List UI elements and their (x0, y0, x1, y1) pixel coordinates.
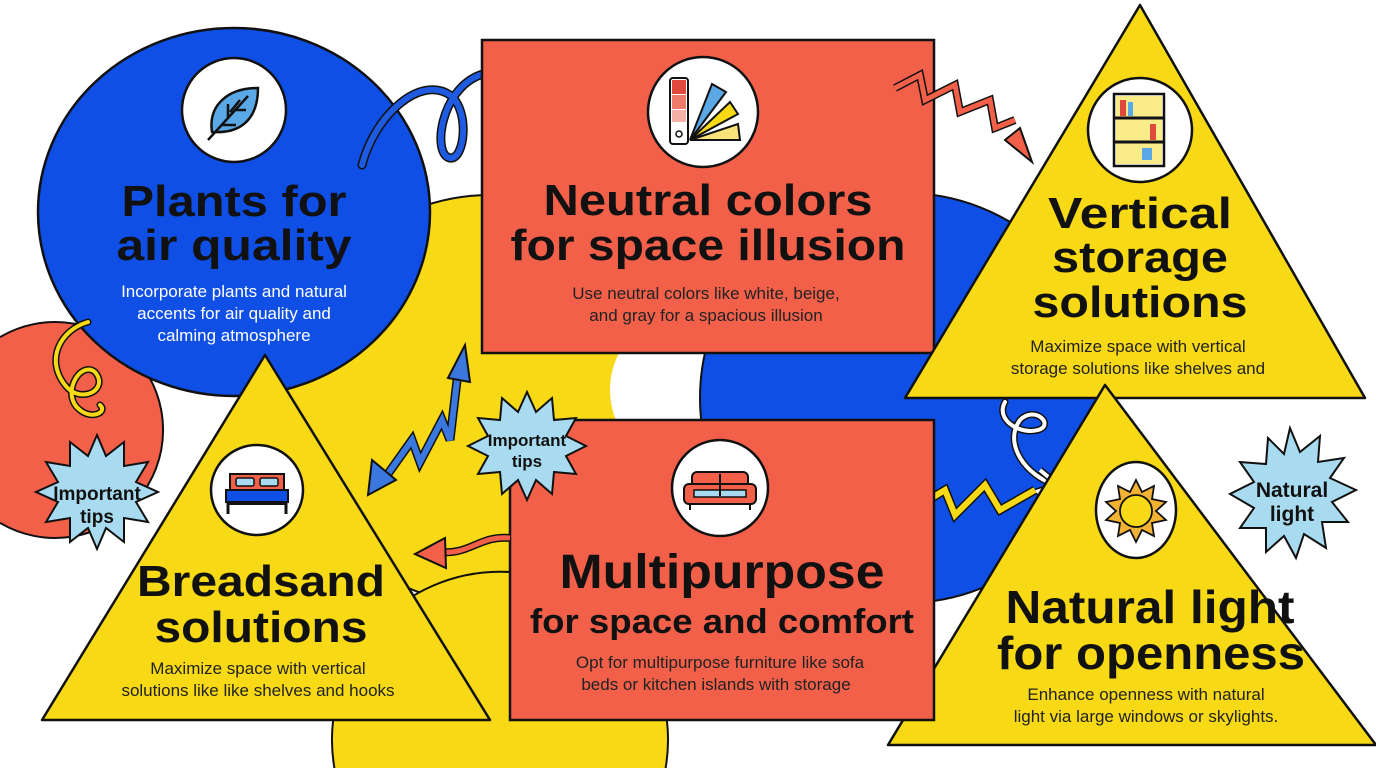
heading: plants: Plants for (122, 177, 346, 226)
arrow: yellow loop (56, 322, 102, 415)
badge: important tips center: Important (488, 431, 567, 450)
badge: natural light (1230, 428, 1356, 558)
icon: sun (1096, 462, 1176, 558)
background: red circle left (0, 322, 163, 538)
badge: important tips left (36, 435, 158, 549)
badge: natural light: Natural (1256, 479, 1328, 502)
arrow: red zigzag (895, 75, 1032, 162)
background: yellow circle center (285, 195, 695, 605)
text: neutral description: Use neutral colors like white, beige, (572, 284, 840, 303)
heading: neutral colors: Neutral colors (544, 176, 872, 225)
heading: vertical storage: solutions (1032, 278, 1248, 327)
panel: natural light (888, 385, 1376, 745)
panel: plants (38, 28, 430, 396)
text: breadsand description: Maximize space with vertical (150, 659, 366, 678)
panel: multipurpose (510, 420, 934, 720)
heading: neutral colors: for space illusion (510, 221, 906, 270)
icon: shelf (1088, 78, 1192, 182)
icon: bed (211, 445, 303, 535)
text: vertical description: storage solutions like shelves and (1011, 359, 1265, 378)
panel: vertical storage (905, 5, 1365, 398)
panel: breadsand (42, 355, 490, 720)
icon: sofa (672, 440, 768, 536)
heading: vertical storage: Vertical (1048, 189, 1232, 238)
text: vertical description: Maximize space with vertical (1030, 337, 1246, 356)
background: white circle (610, 310, 770, 470)
icon: leaf (182, 58, 286, 162)
background: blue circle right (700, 193, 1110, 603)
heading: breadsand: Breadsand (137, 557, 385, 606)
badge: important tips left: Important (53, 484, 141, 505)
text: breadsand description: solutions like like shelves and hooks (121, 681, 395, 700)
text: multipurpose description: Opt for multipurpose furniture like sofa (576, 653, 865, 672)
text: plants description: Incorporate plants and natural (121, 282, 347, 301)
arrow: blue double zigzag (368, 345, 470, 495)
heading: plants: air quality (116, 221, 352, 270)
text: neutral description: and gray for a spacious illusion (589, 306, 823, 325)
arrow: red curve (415, 538, 510, 568)
background: yellow circle bottom (332, 572, 668, 768)
heading: multipurpose: for space and comfort (530, 603, 914, 641)
panel: neutral colors (482, 40, 934, 353)
text: multipurpose description: beds or kitchen islands with storage (581, 675, 851, 694)
icon: color swatches (648, 57, 758, 167)
heading: multipurpose: Multipurpose (560, 546, 884, 599)
arrow: blue loop (362, 71, 540, 165)
heading: breadsand: solutions (154, 603, 368, 652)
heading: vertical storage: storage (1052, 233, 1228, 282)
text: natural light description: light via large windows or skylights. (1014, 707, 1278, 726)
badge: important tips center (468, 392, 586, 500)
arrow: yellow zigzag (888, 470, 1035, 515)
arrow: white loop (1003, 402, 1058, 492)
heading: natural light: for openness (997, 627, 1305, 679)
text: plants description: calming atmosphere (157, 326, 311, 345)
badge: natural light: light (1270, 503, 1314, 526)
badge: important tips left: tips (80, 507, 114, 528)
text: plants description: accents for air quality and (137, 304, 331, 323)
heading: natural light: Natural light (1006, 581, 1294, 633)
badge: important tips center: tips (512, 452, 542, 471)
text: natural light description: Enhance openness with natural (1027, 685, 1265, 704)
